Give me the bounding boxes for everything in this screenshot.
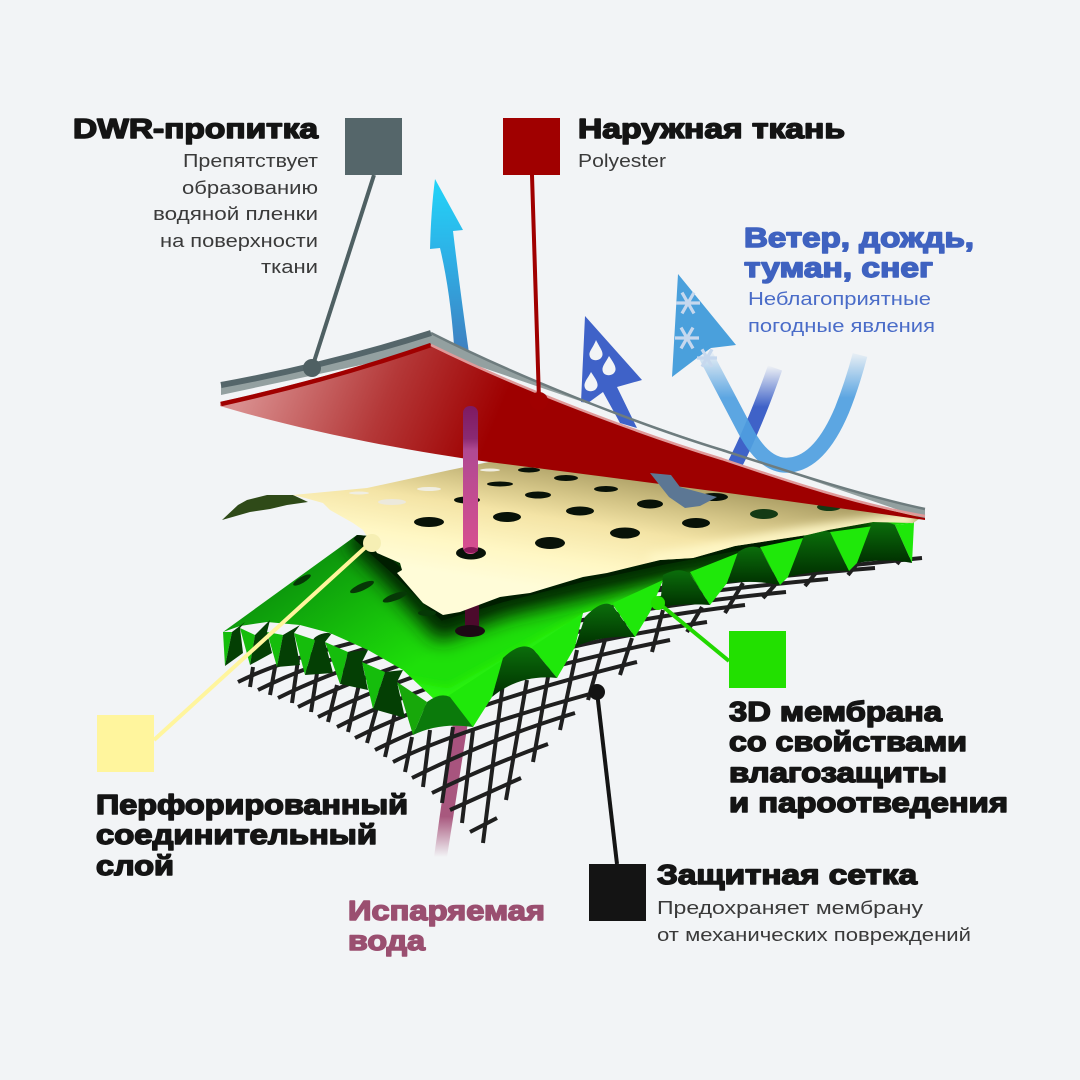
DWR color square bbox=[345, 118, 402, 175]
outer fabric leader line bbox=[530, 175, 548, 410]
membrane heading: со свойствами bbox=[729, 726, 967, 757]
membrane heading: влагозащиты bbox=[729, 757, 947, 788]
membrane holes bbox=[292, 572, 436, 643]
scrap of dark green fabric on the left bbox=[222, 495, 308, 520]
membrane dark arches, right bbox=[492, 522, 912, 697]
DWR impregnation sheet bbox=[221, 333, 925, 519]
perforated layer heading: слой bbox=[96, 850, 174, 881]
DWR leader line bbox=[303, 175, 374, 377]
membrane corner tooth bbox=[413, 695, 473, 735]
green 3D membrane layer bbox=[223, 515, 914, 735]
outer fabric color square bbox=[503, 118, 560, 175]
protective mesh layer bbox=[238, 558, 922, 843]
evaporating water stream, upper rod bbox=[463, 406, 478, 554]
membrane heading: 3D мембрана bbox=[729, 696, 942, 727]
label: protective mesh bbox=[589, 684, 971, 945]
perforated connecting layer bbox=[293, 462, 925, 615]
label: evaporated water bbox=[348, 895, 545, 956]
membrane bright teeth, left bbox=[223, 628, 427, 735]
DWR description: на поверхности bbox=[160, 230, 318, 251]
mesh leader line bbox=[589, 684, 617, 864]
label: DWR bbox=[73, 113, 402, 377]
perforated layer color square bbox=[97, 715, 154, 772]
DWR description: Препятствует bbox=[183, 150, 319, 171]
arrow: water vapour going out bbox=[430, 179, 469, 353]
membrane heading: и пароотведения bbox=[729, 787, 1008, 818]
membrane color square bbox=[729, 631, 786, 688]
weather description bbox=[748, 288, 935, 336]
perforated layer leader line bbox=[154, 534, 381, 740]
folded notch of vapour channel bbox=[650, 473, 717, 508]
DWR description: водяной пленки bbox=[153, 203, 318, 224]
evaporating water stream, between layers bbox=[455, 605, 485, 637]
yellow sheet bbox=[293, 462, 925, 615]
label: outer fabric bbox=[503, 113, 845, 410]
arrow: rain bbox=[581, 316, 642, 428]
mesh description: от механических повреждений bbox=[657, 925, 971, 945]
rain drops bbox=[584, 340, 616, 391]
mesh description: Предохраняет мембрану bbox=[657, 898, 923, 918]
label: evaporated water: вода bbox=[348, 925, 425, 956]
membrane shading bbox=[357, 526, 880, 697]
perforated layer heading bbox=[96, 789, 408, 881]
arrow: snow bbox=[672, 274, 860, 465]
perforation holes bbox=[414, 468, 841, 560]
DWR heading: DWR-пропитка bbox=[73, 113, 318, 144]
label: 3D membrane bbox=[651, 596, 1008, 818]
outer fabric heading: Наружная ткань bbox=[578, 113, 845, 144]
membrane leader line bbox=[651, 596, 729, 661]
membrane dark teeth, left bbox=[225, 620, 405, 718]
weather heading: туман, снег bbox=[744, 252, 933, 283]
mesh heading: Защитная сетка bbox=[657, 859, 918, 890]
weather description: Неблагоприятные bbox=[748, 288, 931, 309]
label: evaporated water: Испаряемая bbox=[348, 895, 545, 926]
DWR description: образованию bbox=[182, 177, 318, 198]
label: weather bbox=[744, 222, 974, 336]
outer fabric description: Polyester bbox=[578, 150, 666, 171]
pale glow along lower right edge bbox=[650, 518, 915, 562]
membrane bright teeth, right bbox=[445, 523, 914, 727]
DWR description bbox=[153, 150, 319, 277]
perforated layer heading: соединительный bbox=[96, 819, 377, 850]
snowflakes bbox=[675, 293, 717, 367]
weather heading: Ветер, дождь, bbox=[744, 222, 974, 253]
perforated layer heading: Перфорированный bbox=[96, 789, 408, 820]
weather description: погодные явления bbox=[748, 315, 935, 336]
weather heading bbox=[744, 222, 974, 283]
label: perforated layer bbox=[96, 534, 408, 881]
mesh color square bbox=[589, 864, 646, 921]
arrow: wind passing bbox=[733, 368, 775, 468]
membrane heading bbox=[729, 696, 1008, 818]
mesh description bbox=[657, 898, 971, 945]
DWR description: ткани bbox=[261, 256, 318, 277]
outer fabric sheet bbox=[220, 345, 925, 520]
membrane base surface bbox=[223, 515, 914, 727]
evaporating water stream, lower part bbox=[434, 722, 468, 857]
